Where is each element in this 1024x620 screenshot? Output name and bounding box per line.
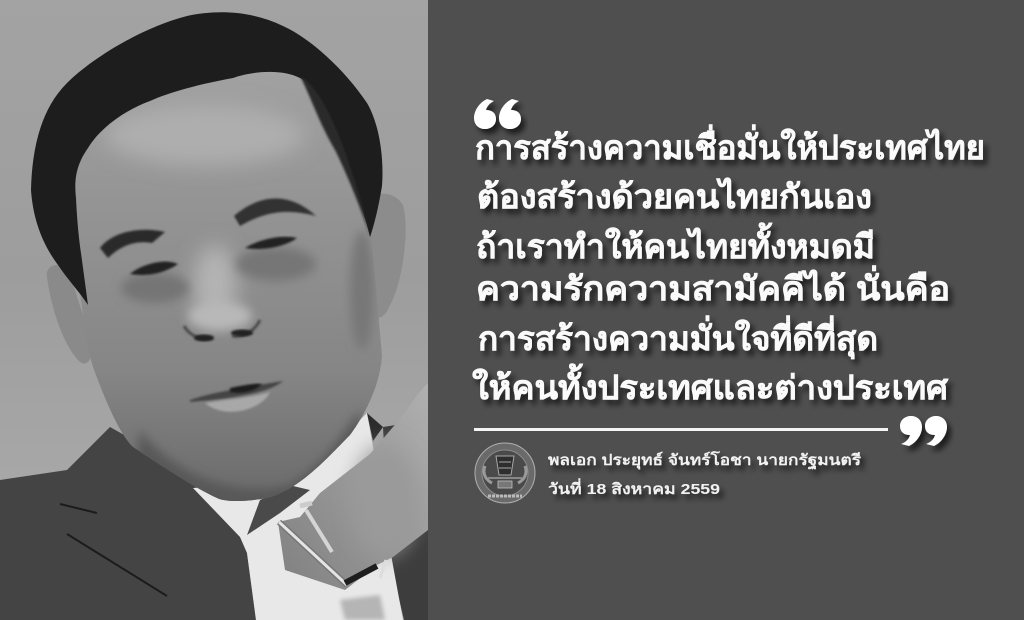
icon: government seal [475, 443, 535, 503]
quote line 2: ต้องสร้างด้วยคนไทยกันเอง [477, 177, 872, 215]
attribution date: วันที่ 18 สิงหาคม 2559 [548, 478, 720, 498]
quote line 5: การสร้างความมั่นใจที่ดีที่สุด [478, 315, 878, 360]
divider line [474, 428, 888, 431]
icon: closing quotation mark [900, 416, 947, 446]
nose [188, 302, 252, 330]
photo: portrait of speaker [0, 0, 428, 620]
quote text [472, 124, 985, 406]
quote line 6: ให้คนทั้งประเทศและต่างประเทศ [472, 363, 949, 406]
quote line 3: ถ้าเราทำให้คนไทยทั้งหมดมี [476, 222, 875, 265]
quote line 1: การสร้างความเชื่อมั่นให้ประเทศไทย [475, 124, 985, 166]
mouth [190, 381, 283, 402]
attribution [548, 450, 862, 498]
hand [278, 383, 428, 590]
quote line 4: ความรักความสามัคคีได้ นั่นคือ [476, 265, 950, 307]
eye bags [121, 273, 189, 303]
attribution name: พลเอก ประยุทธ์ จันทร์โอชา นายกรัฐมนตรี [548, 450, 862, 470]
icon: opening quotation mark [474, 99, 521, 129]
